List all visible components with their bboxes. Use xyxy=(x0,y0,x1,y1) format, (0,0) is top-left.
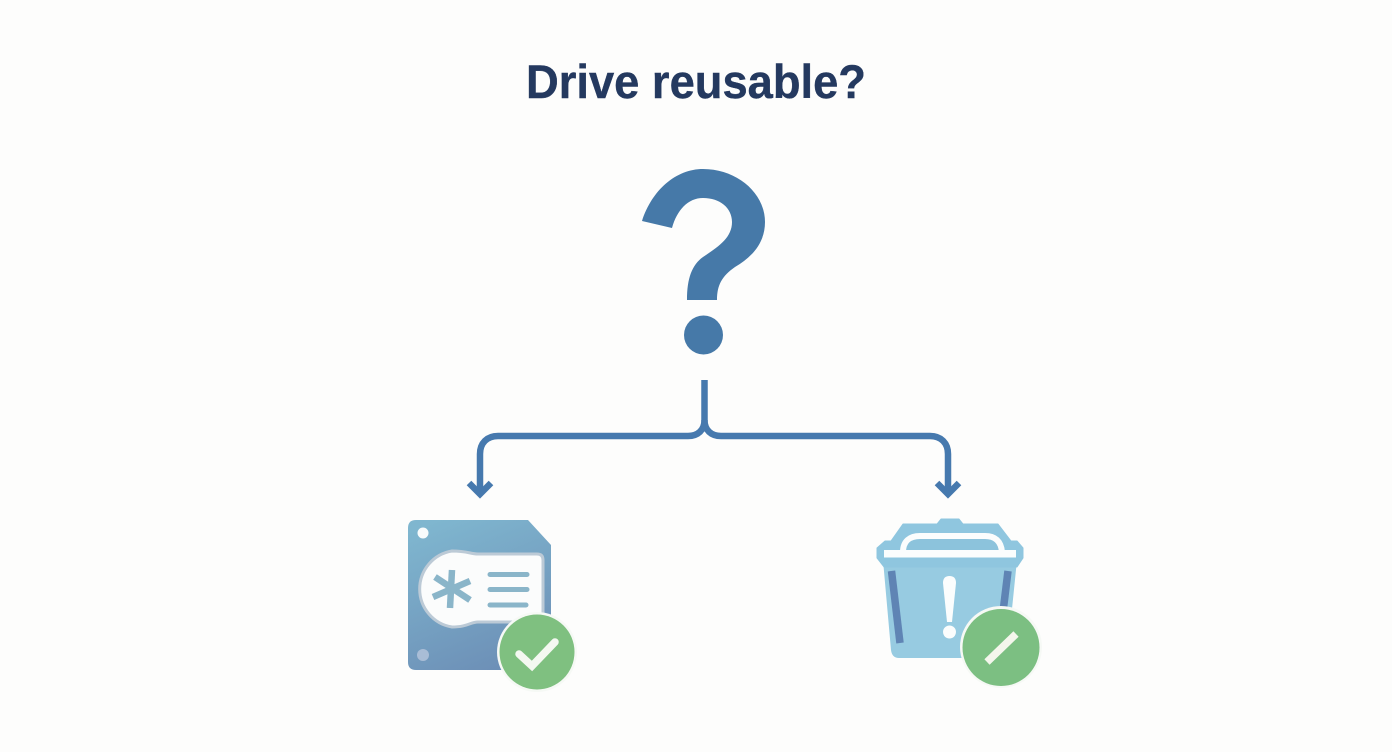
asterisk symbol xyxy=(433,570,470,608)
drive body xyxy=(408,520,551,670)
icon: hard drive with check badge xyxy=(408,520,577,692)
icon: question mark xyxy=(642,169,765,354)
exclamation mark xyxy=(943,576,956,638)
icon: trash bin with warning and badge xyxy=(877,519,1042,688)
label text lines xyxy=(490,574,527,605)
arrows: branching decision connector xyxy=(469,380,959,495)
slash badge xyxy=(960,606,1042,688)
lid white bar and handle xyxy=(884,536,1016,558)
drive label plate xyxy=(420,551,543,627)
drive screw holes xyxy=(417,528,429,661)
bin side bars xyxy=(892,571,1008,643)
bin body xyxy=(883,560,1017,658)
title: Drive reusable? xyxy=(526,55,866,108)
bin lid xyxy=(877,519,1023,567)
check badge xyxy=(497,612,577,692)
